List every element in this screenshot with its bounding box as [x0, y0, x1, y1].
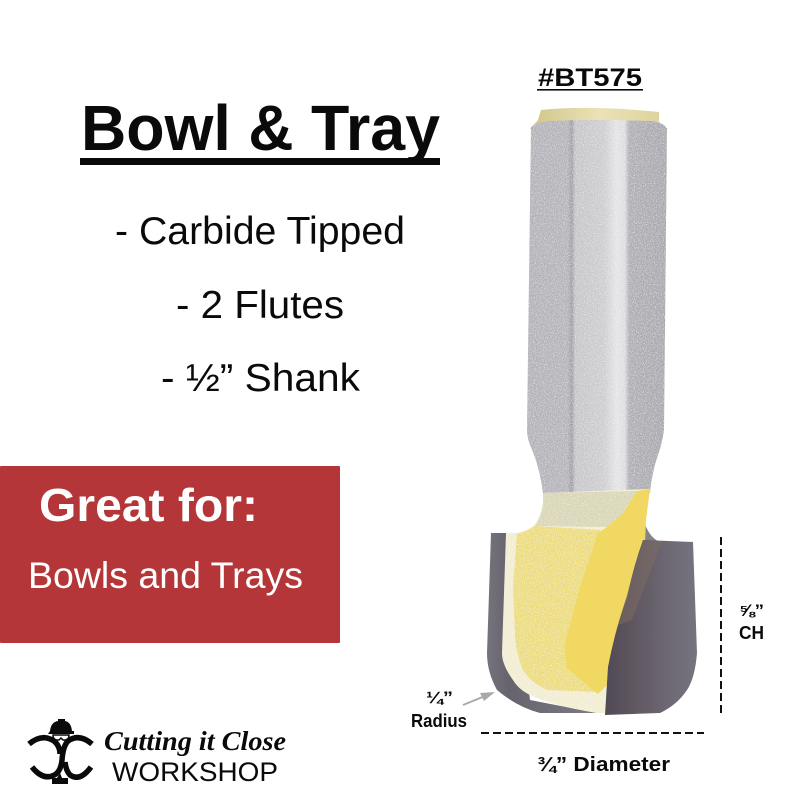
- title: Bowl & Tray: Bowl & Tray: [81, 92, 440, 164]
- diameter dimension line: [481, 732, 704, 734]
- router bit photo: [487, 108, 697, 715]
- feature: carbide tipped: - Carbide Tipped: [115, 210, 405, 253]
- s-curve with lower left arc: [32, 738, 92, 777]
- arrow: radius pointer: [463, 692, 495, 705]
- diameter label: ¾” Diameter: [537, 754, 670, 776]
- bit shank: [527, 120, 667, 493]
- ch dimension line: [720, 537, 722, 716]
- radius label: Radius: [411, 711, 467, 731]
- logo wordmark: [104, 726, 286, 787]
- right carbide blade: [605, 540, 697, 715]
- feature list: [115, 210, 405, 400]
- base: [52, 773, 68, 784]
- left carbide blade: [487, 533, 597, 713]
- speckled yellow flute: [513, 526, 600, 692]
- bright yellow flute face: [565, 489, 650, 694]
- lower right arc: [65, 762, 91, 777]
- heading: great for: Great for:: [39, 479, 258, 531]
- neck speckled patch: [535, 491, 637, 527]
- radius label: ¼”: [426, 688, 453, 707]
- bit cap: [530, 108, 668, 129]
- panel: great for: [0, 466, 340, 643]
- ch label: CH: [739, 623, 764, 643]
- neck shoulder: [640, 524, 660, 545]
- ch label: [739, 601, 764, 643]
- radius label: [411, 688, 467, 731]
- cream cutting edge: [502, 489, 650, 713]
- logo icon: [29, 719, 92, 784]
- text: bowls and trays: Bowls and Trays: [28, 555, 303, 596]
- ch label: ⅝”: [739, 601, 764, 620]
- hard hat: [48, 719, 74, 734]
- product code: #BT575: [538, 64, 642, 92]
- goggles: [53, 735, 69, 740]
- logo wordmark: WORKSHOP: [112, 757, 278, 787]
- feature: 2 flutes: - 2 Flutes: [176, 284, 344, 327]
- left upper arc: [29, 738, 60, 754]
- feature: half inch shank: - ½” Shank: [161, 357, 361, 400]
- logo wordmark: Cutting it Close: [104, 726, 286, 756]
- blade highlight: [618, 541, 662, 625]
